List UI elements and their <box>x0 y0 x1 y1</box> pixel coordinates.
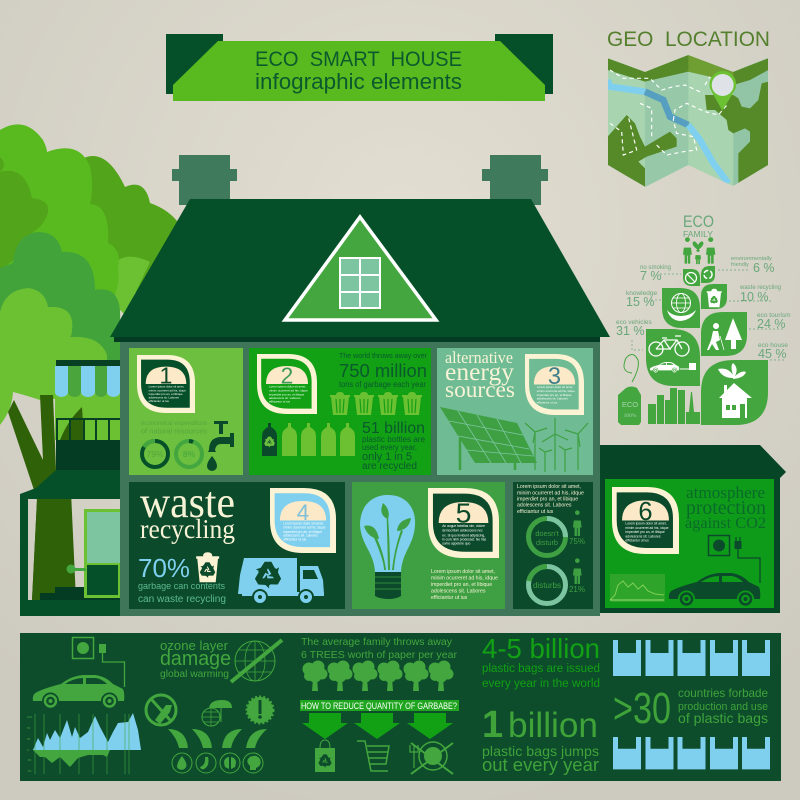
icon: eco tag <box>618 354 641 425</box>
panel 2: garbage: 51 billion <box>362 420 425 437</box>
more than 30 countries: of plastic bags <box>678 710 768 726</box>
icon: recycling truck <box>238 558 324 604</box>
panel 2: garbage: plastic bottles are <box>362 435 425 444</box>
plastic bags top row <box>613 640 770 676</box>
icon: crossed plate <box>410 742 453 774</box>
badge 5 <box>428 488 499 558</box>
icon: globe and thermometer <box>231 640 282 682</box>
icon: family <box>683 237 715 264</box>
panel 2: garbage: tons of garbage each year <box>339 380 426 389</box>
icon: socket and plug <box>72 638 124 687</box>
badge 1: efficiantur ut ius <box>149 399 169 403</box>
labels: knowledge <box>626 290 657 297</box>
4-5 billion statistic: every year in the world <box>482 678 600 690</box>
title banner <box>166 34 553 101</box>
badge 4: minim ocurreret ad his, idque <box>283 526 326 530</box>
labels: 6 % <box>753 261 775 275</box>
mini line chart <box>610 574 665 602</box>
right annex: atmosphere protection <box>600 445 786 613</box>
badge 2 <box>257 354 317 414</box>
ozone layer text: global warming <box>160 669 229 680</box>
icon: eco tag: ECO <box>622 400 638 409</box>
plastic bags bottom row <box>613 737 770 769</box>
icon: recycle bin <box>196 552 219 582</box>
panel 5: light bulb: adolescens sit. Labores <box>431 588 486 594</box>
badge 1: Lorem ipsum dolor sit amet, <box>149 384 184 388</box>
donut 21% <box>528 558 585 604</box>
badge 2: imperdiet pro an, et libique <box>269 392 305 396</box>
1 billion statistic: plastic bags jumps <box>482 743 599 759</box>
labels: 31 % <box>616 324 644 338</box>
labels: no smoking <box>640 264 671 271</box>
eco family: ECO <box>683 212 714 231</box>
chimneys <box>172 155 548 205</box>
panel 2: garbage: 750 million <box>339 360 427 381</box>
badge 2: minim ocurreret ad his, idque <box>269 389 308 393</box>
panel 6: disturb statistics: minim ocurreret ad his, idque <box>517 490 584 496</box>
badge 4: adolescens sit. Labores <box>283 534 318 538</box>
badge 1: minim ocurreret ad his, idque <box>149 388 186 392</box>
badge 2: efficiantur ut ius <box>269 400 290 404</box>
badge 6: minim ocurreret ad his, idque <box>625 526 669 530</box>
leaf: eco tourism <box>701 312 747 356</box>
panel 5: light bulb <box>352 482 505 609</box>
eco family: FAMILY <box>683 229 713 239</box>
labels: 24 % <box>757 317 786 331</box>
donut 75%: 75% <box>569 537 585 546</box>
icon: car <box>33 675 124 706</box>
badge 6: imperdiet pro an, et libique <box>625 530 665 534</box>
ozone layer text <box>160 638 231 680</box>
ring 8%: 8% <box>183 449 196 459</box>
icon: umbrella globe <box>202 700 232 726</box>
more than 30 countries <box>613 684 768 733</box>
badge 3: 3 <box>548 363 561 390</box>
title banner: ECO SMART HOUSE <box>255 47 462 71</box>
badge 5: An augue fabellas vim, dolore <box>442 524 485 528</box>
panel 6: disturb statistics: Lorem ipsum dolor sit amet, <box>517 484 581 490</box>
connector lines <box>632 270 786 360</box>
badge 3: adolescens sit. Labores <box>537 397 568 401</box>
house body <box>120 342 600 616</box>
dormer window <box>285 217 436 320</box>
1 billion statistic: 1 <box>482 704 503 746</box>
ozone layer text: ozone layer <box>160 638 229 653</box>
icon: recycle bag <box>315 740 335 772</box>
4-5 billion statistic <box>482 633 600 690</box>
labels: 10 % <box>740 290 768 304</box>
badge 3: imperdiet pro an, et libique <box>537 393 572 397</box>
leaf: eco vehicles <box>646 329 700 386</box>
icon: wind turbines <box>525 418 588 472</box>
icon: city <box>648 388 700 424</box>
labels: eco vehicles <box>616 319 653 326</box>
title banner: infographic elements <box>255 69 462 94</box>
1 billion statistic: billion <box>508 706 598 745</box>
leaf: knowledge <box>662 288 700 328</box>
panel 1: natural resources: of natural resources <box>141 426 207 436</box>
panel 5: light bulb: efficiantur ut ius <box>431 595 468 601</box>
4-5 billion statistic: plastic bags are issued <box>482 663 600 675</box>
bottom panel <box>20 633 781 781</box>
icon: eco tag: 100% <box>624 413 637 419</box>
4-5 billion statistic: 4-5 billion <box>482 633 600 664</box>
labels: 15 % <box>626 295 654 309</box>
leaf: environmentally friendly <box>701 266 715 283</box>
panel 4: waste recycling: garbage can contents <box>138 581 225 591</box>
panel 6: disturb statistics <box>513 482 593 609</box>
leaf: no smoking <box>683 269 700 286</box>
icon: no spray <box>146 695 176 725</box>
panel 3: alternative energy: alternative <box>445 348 513 367</box>
badge 2: 2 <box>281 362 293 388</box>
panel 5: light bulb: imperdiet pro an, et libique <box>431 582 492 588</box>
roof <box>110 199 610 342</box>
badge 5: ex. Si quo invidunt adipiscing, <box>442 533 485 537</box>
area chart <box>27 713 141 774</box>
paper and trees text: 6 TREES worth of paper per year <box>301 649 457 661</box>
badge 6: 6 <box>638 498 653 526</box>
panel 4: waste recycling <box>129 478 345 609</box>
more than 30 countries: >30 <box>613 684 671 733</box>
labels: waste recycling <box>739 284 781 291</box>
labels: 7 % <box>640 269 662 283</box>
icon: car <box>669 573 760 604</box>
donut 75%: disturb <box>536 538 558 547</box>
panel 5: light bulb: minim ocurreret ad his, idque <box>431 576 498 582</box>
icons: bottles <box>262 423 355 456</box>
panel 3: alternative energy: energy <box>445 359 514 386</box>
icon: shopping cart <box>357 741 389 771</box>
labels: friendly <box>731 262 749 268</box>
tree <box>0 124 180 600</box>
labels: environmentally <box>731 256 772 262</box>
panel 2: garbage: used every year, <box>362 443 417 452</box>
paper and trees text: The average family throws away <box>301 636 453 648</box>
badge 3: Lorem ipsum dolor sit amet, <box>537 385 573 389</box>
icon: solar panel <box>440 407 537 470</box>
badge 2: adolescens sit. Labores <box>269 396 301 400</box>
badge 3 <box>525 354 584 415</box>
labels: eco tourism <box>757 312 791 319</box>
badge 5: democritum adolescens nec <box>442 529 483 533</box>
geo location heading: GEO LOCATION <box>607 28 770 51</box>
badge 2: Lorem ipsum dolor sit amet, <box>269 385 306 389</box>
more than 30 countries: production and use <box>678 701 768 713</box>
panel 3: alternative energy <box>437 348 593 475</box>
right annex: atmosphere protection: protection <box>686 497 766 519</box>
panel 1: natural resources: economical expenditure <box>141 420 207 427</box>
panel 5: light bulb: Lorem ipsum dolor sit amet, <box>431 569 495 575</box>
panel 6: disturb statistics: adolescens sit. Labores <box>517 502 572 508</box>
panel 6: disturb statistics: efficiantur ut ius <box>517 509 554 515</box>
donut 75% <box>528 510 585 556</box>
panel 4: waste recycling: can waste recycling <box>138 594 226 605</box>
panel 6: disturb statistics: imperdiet pro an, et libique <box>517 496 578 502</box>
icons: circles <box>172 753 263 773</box>
area chart: -50 <box>27 769 32 773</box>
icons: leaves <box>168 729 267 748</box>
donut 21%: 21% <box>569 585 585 594</box>
left annex house <box>20 360 121 616</box>
right annex: atmosphere protection: against CO2 <box>685 513 766 532</box>
damage icons <box>146 695 273 773</box>
electric car and chart <box>27 638 141 774</box>
badge 1: adolescens sit. Labores <box>149 396 180 400</box>
badge 5: in cum nibh prodesset. Ne has <box>442 538 487 541</box>
more than 30 countries: countries forbade <box>678 687 768 700</box>
badge 5: sumo appetere quo <box>442 542 470 546</box>
panel 2: garbage <box>249 348 431 475</box>
panel 4: waste recycling: recycling <box>140 514 235 544</box>
badge 4: imperdiet pro an, et libique <box>283 530 322 534</box>
labels: 45 % <box>758 347 786 361</box>
right annex: atmosphere protection: atmosphere <box>686 483 765 502</box>
icon: tap and drop <box>207 421 234 471</box>
how to reduce heading: HOW TO REDUCE QUANTITY OF GARBABE? <box>301 701 457 712</box>
icon: location pin <box>709 71 736 111</box>
badge 4: efficiantur ut ius <box>283 538 307 542</box>
labels: eco house <box>758 342 788 349</box>
badge 1: 1 <box>160 362 172 388</box>
icon: socket and plug <box>708 536 760 583</box>
area chart: 50 <box>27 737 31 741</box>
map <box>607 53 770 188</box>
panel 3: alternative energy: sources <box>445 377 515 402</box>
donut 21%: disturbs <box>533 581 561 590</box>
area chart: -50 <box>27 758 32 762</box>
awning <box>55 366 120 397</box>
ozone layer text: damage <box>160 647 231 670</box>
icons: six trees <box>302 660 454 691</box>
door <box>66 509 120 598</box>
badge 3: minim ocurreret ad his, idque <box>537 389 575 393</box>
badge 4: 4 <box>297 500 309 525</box>
1 billion statistic: out every year <box>482 754 599 775</box>
badge 6: Lorem ipsum dolor sit amet, <box>625 522 667 526</box>
panel 4: waste recycling: 70% <box>138 553 190 583</box>
badge 1: imperdiet pro an, et libique <box>149 392 183 396</box>
area chart: 100 <box>27 715 32 719</box>
donut 75%: doesn't <box>535 529 559 538</box>
badge 4: Lorem ipsum dolor sit amet, <box>283 521 324 525</box>
eco family <box>616 212 791 425</box>
icon: bulb with plant <box>360 495 415 599</box>
panel 1: natural resources <box>129 348 243 475</box>
icon: warning badge <box>247 697 273 723</box>
badge 6: adolescens sit. Labores <box>625 534 661 538</box>
labels <box>616 256 791 361</box>
ring 79%: 79% <box>146 449 164 459</box>
panel 2: garbage: are recycled <box>362 461 417 472</box>
arrows <box>302 713 453 739</box>
panel 2: garbage: The world throws away over <box>339 351 428 360</box>
badge 6 <box>612 487 679 554</box>
badge 5: 5 <box>456 496 471 528</box>
area chart: 50 <box>27 726 31 730</box>
area chart: 0 <box>27 748 29 752</box>
panel 2: garbage: only 1 in 5 <box>362 451 412 463</box>
badge 3: efficiantur ut ius <box>537 400 558 404</box>
icons: trash cans <box>330 392 422 415</box>
leaf: waste recycling <box>701 284 727 309</box>
leaf: eco house <box>701 360 768 425</box>
paper and trees text <box>301 636 457 661</box>
panel 4: waste recycling: waste <box>140 478 235 527</box>
1 billion statistic <box>482 704 599 775</box>
badge 4 <box>270 488 336 553</box>
badge 6: efficiantur ut ius <box>625 538 649 542</box>
badge 1 <box>137 355 195 413</box>
